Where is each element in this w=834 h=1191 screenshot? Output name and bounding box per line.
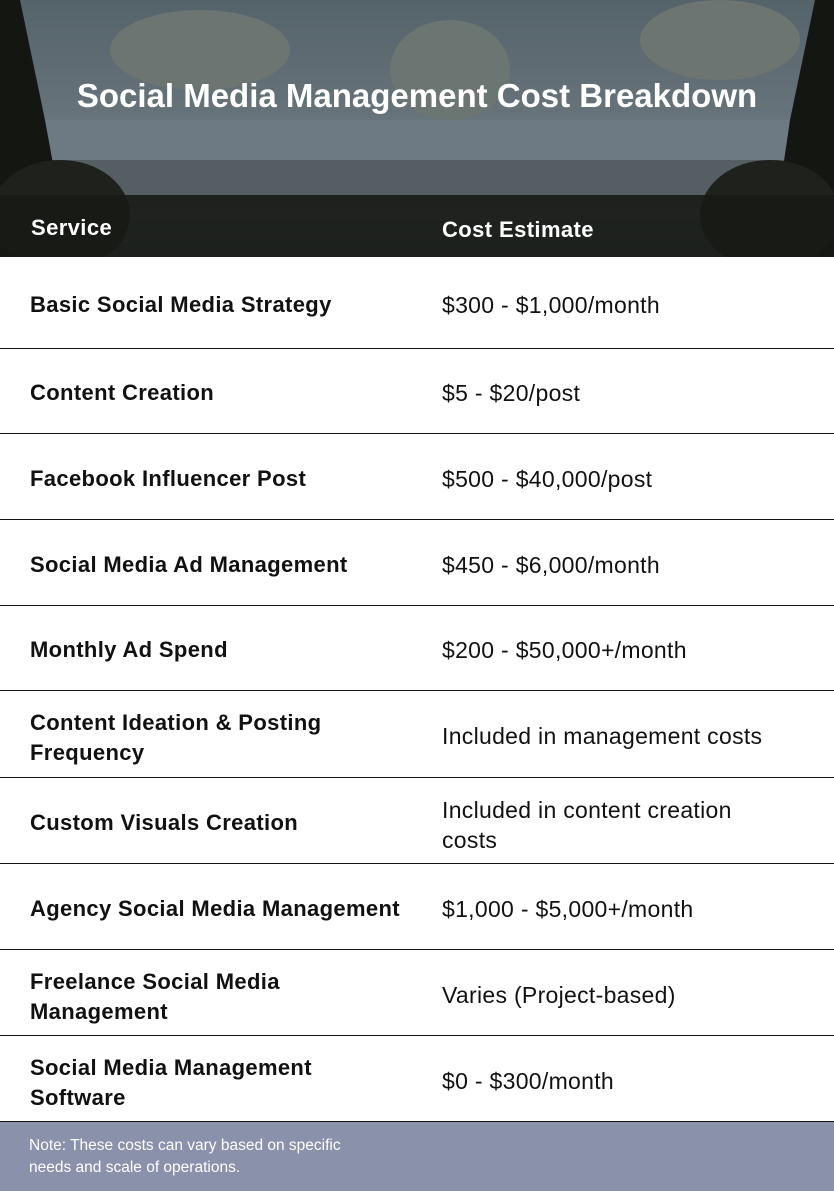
column header: cost: Cost Estimate (442, 217, 594, 242)
row 5: $200 - $50,000+/month (442, 637, 687, 663)
row 1: Basic Social Media Strategy (30, 292, 332, 317)
row 3: Facebook Influencer Post (30, 466, 306, 491)
row 7 (0, 778, 834, 864)
row 9: Varies (Project-based) (442, 982, 676, 1008)
row 3: $500 - $40,000/post (442, 466, 652, 492)
row 6 (0, 691, 834, 778)
title: Social Media Management Cost Breakdown (77, 77, 757, 114)
row 6: Included in management costs (442, 723, 762, 749)
row 4: Social Media Ad Management (30, 552, 348, 577)
row 9: Freelance Social Media Management (30, 969, 280, 1024)
row 4 (0, 520, 834, 606)
row 1: $300 - $1,000/month (442, 292, 660, 318)
header banner (0, 0, 834, 257)
row 10: $0 - $300/month (442, 1068, 614, 1094)
row 5: Monthly Ad Spend (30, 637, 228, 662)
row 7: Custom Visuals Creation (30, 810, 298, 835)
footer note (0, 1122, 834, 1191)
row 2 (0, 349, 834, 434)
row 10 (0, 1036, 834, 1122)
column header: service: Service (31, 215, 112, 240)
footer note: Note: These costs can vary based on specific needs and scale of operations. (29, 1137, 341, 1176)
row 9 (0, 950, 834, 1036)
row 1 (0, 257, 834, 349)
row 2: $5 - $20/post (442, 380, 580, 406)
row 6: Content Ideation & Posting Frequency (30, 710, 321, 765)
row 2: Content Creation (30, 380, 214, 405)
row 10: Social Media Management Software (30, 1055, 312, 1110)
row 8: $1,000 - $5,000+/month (442, 896, 693, 922)
row 5 (0, 606, 834, 691)
row 8 (0, 864, 834, 950)
row 8: Agency Social Media Management (30, 896, 400, 921)
row 7: Included in content creation costs (442, 797, 732, 853)
row 4: $450 - $6,000/month (442, 552, 660, 578)
row 3 (0, 434, 834, 520)
